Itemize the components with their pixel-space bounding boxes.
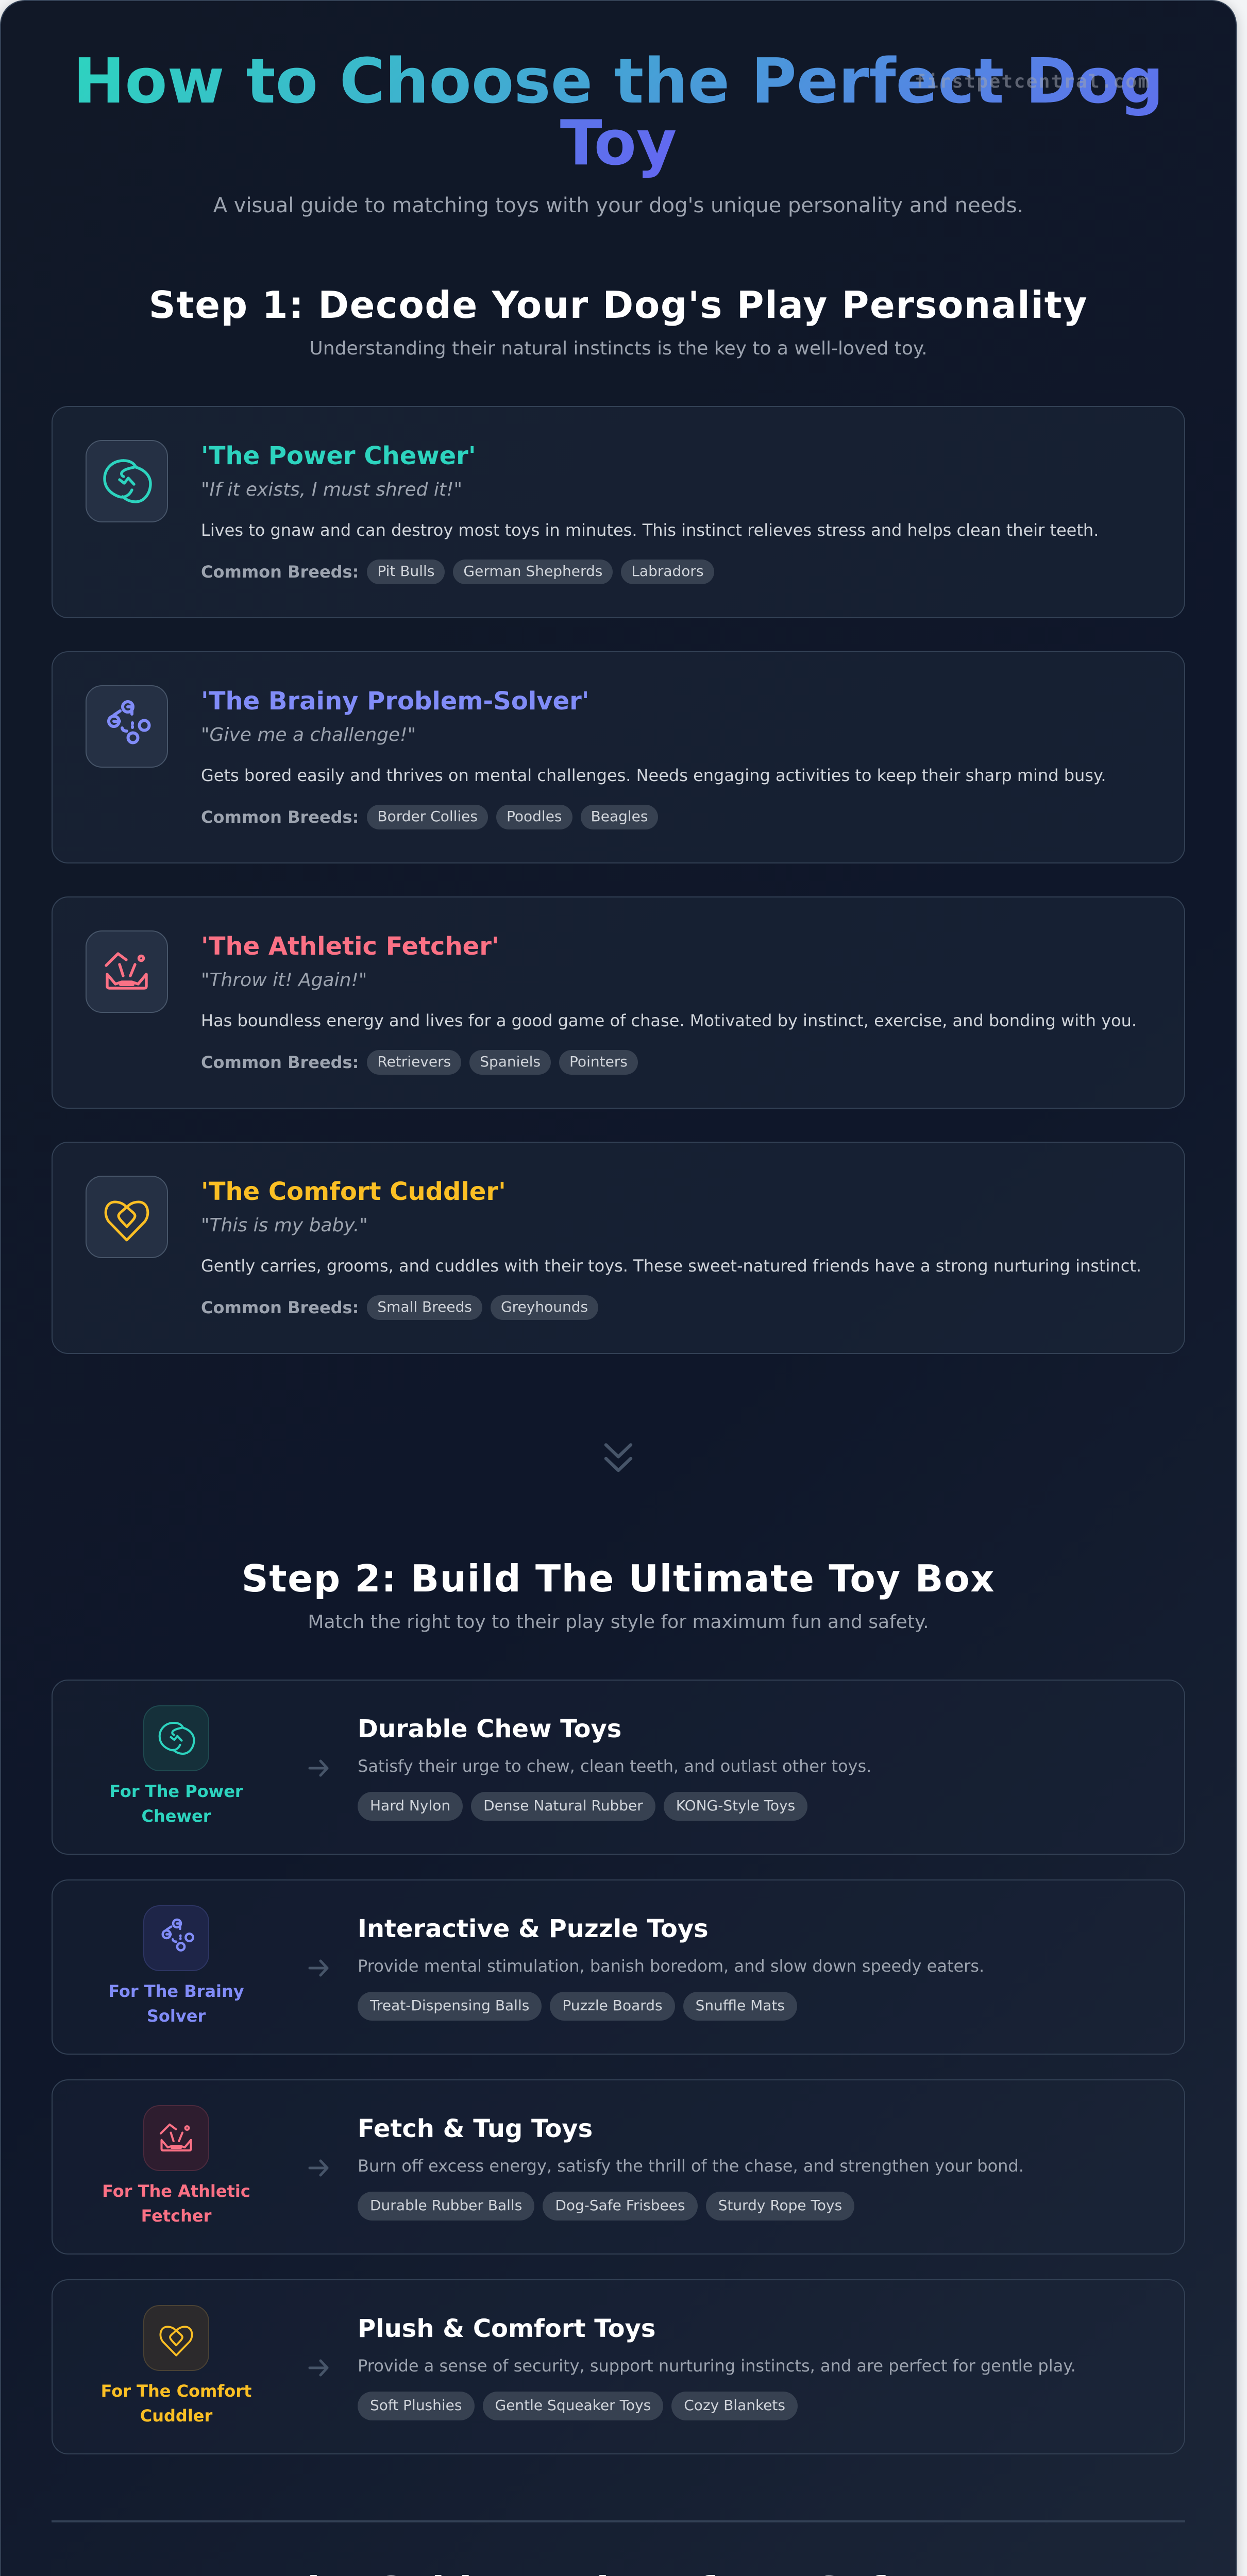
common breeds: Labradors	[631, 563, 704, 580]
icon: brainy	[143, 1905, 209, 1971]
quote: "Give me a challenge!"	[201, 724, 416, 745]
label: For The Comfort	[101, 2381, 251, 2401]
toy tags	[358, 1792, 807, 1821]
common breeds	[201, 1295, 598, 1320]
label	[102, 2181, 250, 2226]
icon: double chevron down	[604, 1443, 633, 1472]
arrow	[308, 1960, 329, 1976]
toy tags	[358, 1992, 797, 2021]
common breeds: Common Breeds:	[201, 807, 359, 827]
toy name: Durable Chew Toys	[358, 1715, 621, 1743]
panel: brainy problem-solver	[52, 651, 1185, 863]
toy tags: KONG-Style Toys	[676, 1797, 795, 1814]
panel: durable chew toys	[52, 1680, 1185, 1855]
common breeds	[201, 560, 714, 584]
icon: power chewer	[143, 1705, 209, 1771]
label: Solver	[147, 2006, 206, 2026]
icon: fetcher	[143, 2105, 209, 2171]
common breeds: Spaniels	[480, 1053, 541, 1070]
description: Gently carries, grooms, and cuddles with their toys. These sweet-natured friends have a strong nurturing instinct.	[201, 1256, 1141, 1276]
toy tags: Sturdy Rope Toys	[718, 2197, 842, 2214]
toy tags: Treat-Dispensing Balls	[370, 1997, 529, 2014]
panel: power chewer	[52, 406, 1185, 618]
common breeds: Common Breeds:	[201, 1053, 359, 1072]
toy tags: Dense Natural Rubber	[483, 1797, 643, 1814]
arrow	[308, 2160, 329, 2176]
toy tags: Soft Plushies	[370, 2397, 462, 2414]
toy tags: Dog-Safe Frisbees	[555, 2197, 685, 2214]
icon: cuddler	[143, 2305, 209, 2371]
heading: step 2: Step 2: Build The Ultimate Toy Box	[242, 1557, 995, 1600]
heading: step 1: Step 1: Decode Your Dog's Play Personality	[149, 283, 1088, 327]
toy tags	[358, 2192, 854, 2221]
description: Gets bored easily and thrives on mental challenges. Needs engaging activities to keep their sharp mind busy.	[201, 766, 1106, 785]
description: Burn off excess energy, satisfy the thrill of the chase, and strengthen your bond.	[358, 2156, 1024, 2176]
subtitle: A visual guide to matching toys with your dog's unique personality and needs.	[213, 194, 1023, 217]
common breeds: Pointers	[569, 1053, 628, 1070]
common breeds: German Shepherds	[463, 563, 602, 580]
toy tags: Puzzle Boards	[562, 1997, 663, 2014]
toy tags: Gentle Squeaker Toys	[495, 2397, 651, 2414]
common breeds: Common Breeds:	[201, 562, 359, 582]
common breeds	[201, 1050, 638, 1075]
common breeds: Small Breeds	[377, 1298, 472, 1315]
icon: power chewer	[86, 440, 168, 522]
common breeds: Poodles	[507, 808, 562, 825]
icon: fetcher	[86, 930, 168, 1013]
arrow	[308, 1760, 329, 1776]
toy tags: Hard Nylon	[370, 1797, 450, 1814]
label	[101, 2381, 251, 2426]
main title: Toy	[560, 108, 677, 179]
toy tags	[358, 2392, 798, 2420]
subheading: step 1: Understanding their natural instincts is the key to a well-loved toy.	[309, 338, 928, 359]
toy name: Fetch & Tug Toys	[358, 2114, 593, 2143]
subheading: step 2: Match the right toy to their play style for maximum fun and safety.	[308, 1612, 929, 1633]
label: Fetcher	[141, 2206, 211, 2226]
toy tags: Cozy Blankets	[684, 2397, 785, 2414]
panel: fetch and tug toys	[52, 2079, 1185, 2255]
name: fetcher: 'The Athletic Fetcher'	[201, 932, 499, 961]
quote: "Throw it! Again!"	[201, 970, 367, 990]
panel: plush and comfort toys	[52, 2279, 1185, 2454]
label	[108, 1981, 244, 2026]
toy tags: Snuffle Mats	[696, 1997, 785, 2014]
label: Cuddler	[140, 2406, 212, 2426]
description: Satisfy their urge to chew, clean teeth, and outlast other toys.	[358, 1756, 871, 1776]
name: brainy: 'The Brainy Problem-Solver'	[201, 687, 589, 716]
common breeds: Common Breeds:	[201, 1298, 359, 1317]
name: cuddler: 'The Comfort Cuddler'	[201, 1177, 506, 1206]
label: For The Athletic	[102, 2181, 250, 2201]
panel: interactive and puzzle toys	[52, 1879, 1185, 2055]
common breeds: Greyhounds	[501, 1298, 588, 1315]
icon: brainy	[86, 685, 168, 768]
main title	[73, 46, 1164, 179]
common breeds	[201, 805, 658, 829]
common breeds: Pit Bulls	[377, 563, 434, 580]
common breeds: Beagles	[591, 808, 648, 825]
label: For The Brainy	[108, 1981, 244, 2001]
watermark: firstpetcentral.com	[915, 71, 1150, 92]
label: Chewer	[141, 1806, 211, 1826]
quote: "This is my baby."	[201, 1215, 368, 1235]
main title: How to Choose the Perfect Dog	[73, 46, 1164, 117]
toy name: Interactive & Puzzle Toys	[358, 1914, 709, 1943]
description: Lives to gnaw and can destroy most toys in minutes. This instinct relieves stress and helps clean their teeth.	[201, 520, 1099, 540]
panel: comfort cuddler	[52, 1142, 1185, 1354]
label	[109, 1782, 243, 1826]
label: For The Power	[109, 1782, 243, 1801]
quote: "If it exists, I must shred it!"	[201, 479, 462, 500]
description: Provide mental stimulation, banish boredom, and slow down speedy eaters.	[358, 1956, 984, 1976]
description: Has boundless energy and lives for a good game of chase. Motivated by instinct, exercise, and bonding with you.	[201, 1011, 1137, 1030]
icon: cuddler	[86, 1176, 168, 1258]
description: Provide a sense of security, support nurturing instincts, and are perfect for gentle play.	[358, 2356, 1076, 2376]
common breeds: Border Collies	[377, 808, 478, 825]
toy name: Plush & Comfort Toys	[358, 2314, 655, 2343]
toy tags: Durable Rubber Balls	[370, 2197, 522, 2214]
arrow	[308, 2360, 329, 2376]
name: power chewer: 'The Power Chewer'	[201, 442, 476, 470]
panel: athletic fetcher	[52, 896, 1185, 1109]
common breeds: Retrievers	[377, 1053, 451, 1070]
